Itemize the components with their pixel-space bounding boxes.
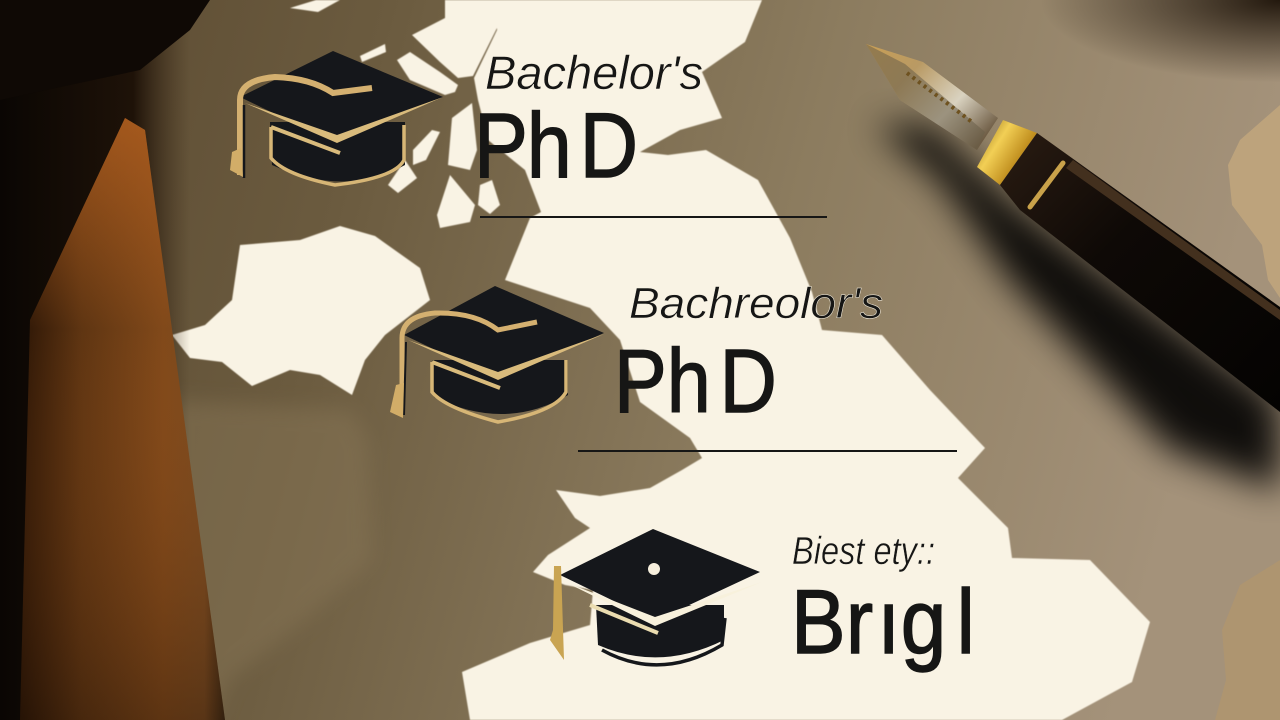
map: Great Britain mainland xyxy=(462,0,1150,720)
icon: graduation cap 2 xyxy=(390,286,604,422)
left dark foreground object xyxy=(0,0,225,720)
map: Ireland xyxy=(172,226,430,395)
label: PhD: PhD xyxy=(474,95,638,197)
label: PhD: PhD xyxy=(614,330,777,431)
top right shadow xyxy=(960,0,1280,110)
label: Brigl: Brıgl xyxy=(791,572,975,673)
gold collar xyxy=(977,120,1037,185)
map of Britain and Ireland xyxy=(172,0,1150,720)
cap 3 group xyxy=(550,529,975,673)
map: Scottish islands xyxy=(290,0,340,12)
icon: graduation cap 1 xyxy=(230,51,443,185)
label: Biest ety: Biest ety:: xyxy=(792,530,935,573)
pen barrel xyxy=(1000,133,1280,412)
label: Bachelor's: Bachelor's xyxy=(485,46,703,99)
pen shadow xyxy=(875,125,1280,490)
label: Bachreolor's: Bachreolor's xyxy=(629,279,883,328)
cap 1 group xyxy=(230,46,703,197)
gold ring xyxy=(1030,163,1063,207)
cap 2 group xyxy=(390,279,883,431)
icon: fountain pen xyxy=(866,44,1280,412)
lighter land patch xyxy=(170,400,372,720)
torn parchment edge at right xyxy=(1215,105,1280,720)
icon: graduation cap 3 xyxy=(550,529,762,665)
pen nib xyxy=(866,44,998,150)
